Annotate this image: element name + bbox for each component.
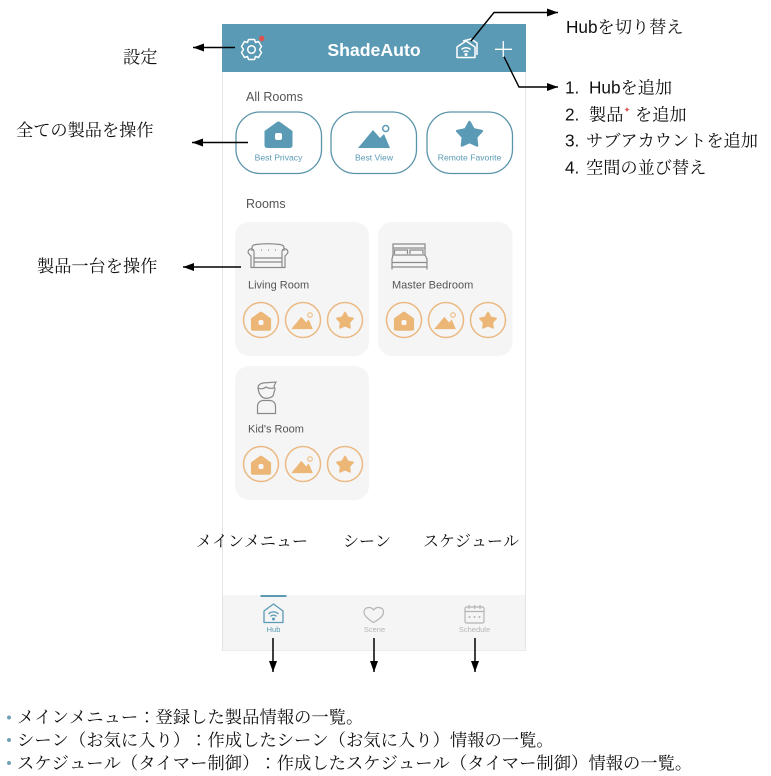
panel: phone screen — [222, 24, 526, 650]
tab: Schedule — [459, 605, 490, 634]
heading: All Rooms: All Rooms — [246, 90, 303, 104]
icon: settings gear — [242, 36, 264, 60]
header bar — [222, 24, 526, 72]
button: Best Privacy — [236, 112, 322, 174]
list: add menu: 3. — [565, 130, 579, 150]
list: add menu: ✦ — [624, 106, 631, 114]
list: add menu: 製品 — [589, 104, 623, 124]
icon: child — [258, 382, 276, 414]
arrow: all products — [192, 142, 248, 144]
list: add menu — [565, 78, 758, 178]
label: switch hub: Hubを切り替え — [566, 17, 683, 37]
bullet list: シーン（お気に入り）：作成したシーン（お気に入り）情報の一覧。 — [17, 730, 554, 750]
card: Living Room: Living Room — [248, 280, 309, 292]
icon: hub switch — [457, 39, 477, 58]
card: Living Room — [235, 222, 369, 356]
icon: add — [495, 41, 512, 57]
label: single product: 製品一台を操作 — [37, 256, 157, 276]
button: Best Privacy: Best Privacy — [255, 152, 303, 162]
arrow: add menu — [504, 57, 558, 87]
card: Master Bedroom — [378, 222, 512, 356]
app title: ShadeAuto — [327, 40, 421, 60]
heading: Rooms: Rooms — [246, 197, 286, 211]
icon: bed — [392, 244, 427, 270]
tab: Schedule: Schedule — [459, 625, 490, 634]
tab: Scene: Scene — [364, 625, 385, 634]
card: Kid's Room: Kid's Room — [248, 424, 304, 436]
list: add menu: 1. — [565, 78, 579, 98]
bullet list: スケジュール（タイマー制御）：作成したスケジュール（タイマー制御）情報の一覧。 — [17, 753, 692, 773]
list: add menu: 4. — [565, 158, 579, 178]
label: scene: シーン — [343, 534, 391, 550]
card: Master Bedroom: Master Bedroom — [392, 280, 473, 292]
list: add menu: Hubを追加 — [589, 78, 672, 98]
arrow: schedule tab — [474, 638, 476, 672]
list: add menu: を追加 — [635, 104, 687, 124]
list: add menu: 2. — [565, 104, 579, 124]
tab: Scene — [364, 608, 385, 634]
tab: Hub: Hub — [267, 625, 280, 634]
icon: sofa — [248, 244, 288, 268]
arrow: scene tab — [373, 638, 375, 672]
arrow: switch hub — [471, 12, 558, 41]
label: schedule: スケジュール — [423, 532, 519, 550]
button: Remote Favorite: Remote Favorite — [438, 152, 501, 162]
label: settings: 設定 — [123, 47, 157, 67]
arrow: settings — [193, 46, 235, 48]
label: all products: 全ての製品を操作 — [16, 120, 154, 140]
card: Kid's Room — [235, 366, 369, 500]
tab: Hub — [264, 604, 283, 634]
button: Remote Favorite — [427, 112, 512, 174]
list: add menu: サブアカウントを追加 — [586, 130, 758, 150]
bullet list — [7, 707, 692, 773]
button: Best View — [331, 112, 416, 174]
button: Best View: Best View — [355, 152, 394, 162]
arrow: single product — [183, 266, 241, 268]
bullet list: メインメニュー：登録した製品情報の一覧。 — [17, 707, 363, 727]
list: add menu: 空間の並び替え — [586, 158, 706, 178]
arrow: hub tab — [272, 638, 274, 672]
label: main menu: メインメニュー — [196, 534, 308, 550]
tab bar — [223, 595, 525, 650]
